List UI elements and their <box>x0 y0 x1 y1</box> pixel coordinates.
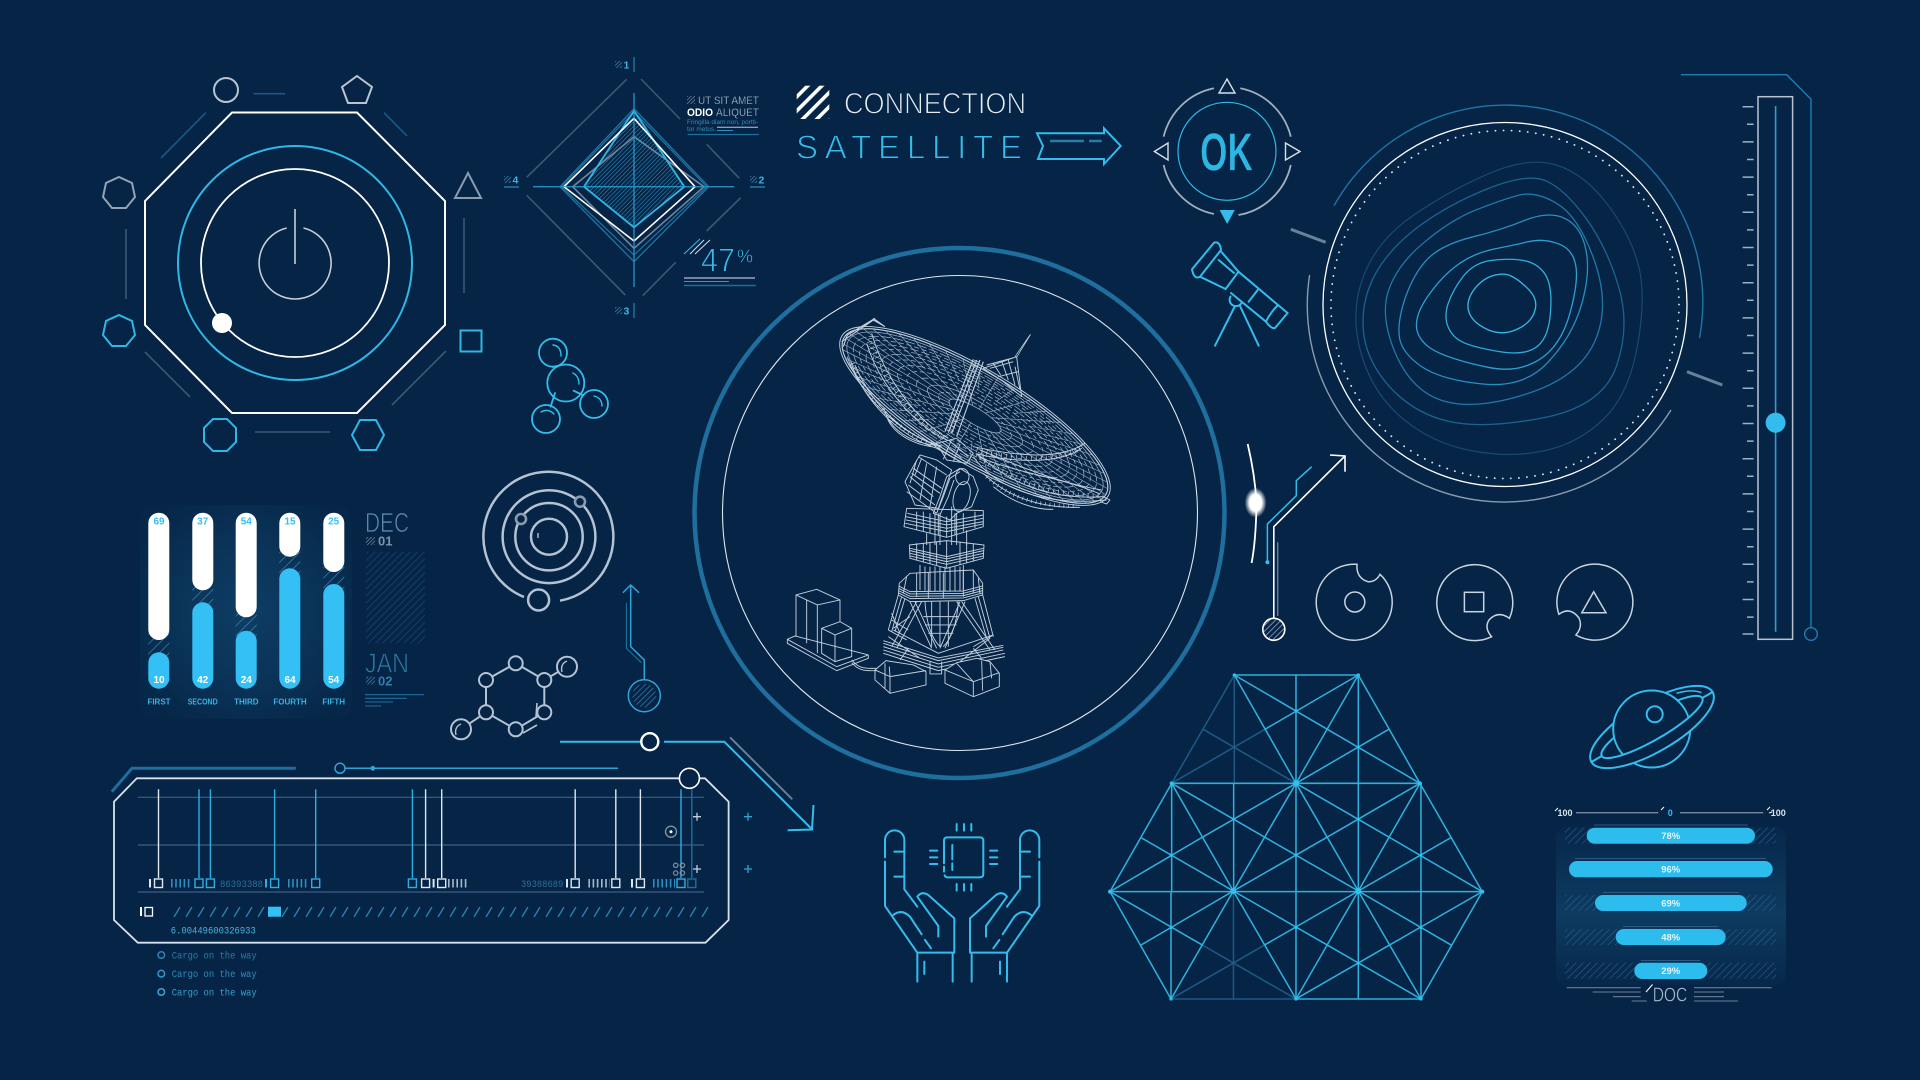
tower base and feet <box>875 630 1005 697</box>
radar legend text: UT SIT AMET <box>698 95 759 107</box>
frame <box>114 778 729 943</box>
radar axis labels: 1 <box>624 60 630 72</box>
slider frame <box>1758 97 1793 639</box>
tower platforms <box>898 507 984 602</box>
percentage values <box>1661 831 1681 977</box>
bar top values: 69 <box>153 516 165 528</box>
central dish rings <box>694 248 1224 778</box>
slider handle <box>1766 413 1786 433</box>
planet body <box>1613 690 1690 768</box>
bar labels: FIFTH <box>322 698 345 706</box>
cyan markers <box>195 789 685 888</box>
frame handle <box>679 768 699 788</box>
date 01: 01 <box>378 534 392 548</box>
bar bottom values <box>153 675 340 686</box>
radar data diamonds <box>533 93 734 287</box>
scale header: 100 <box>1557 808 1573 818</box>
plus signs and small icons <box>666 813 752 875</box>
scale header <box>1555 807 1786 818</box>
icon: hexagon molecule <box>451 656 577 739</box>
dial: triangle knob <box>1557 564 1633 640</box>
dish cross arm <box>945 359 983 437</box>
light streak <box>1245 444 1267 563</box>
scale header: 0 <box>1668 808 1673 818</box>
radar legend text: tor metus. <box>687 126 716 133</box>
OK compass button <box>1154 79 1300 224</box>
radar chart <box>504 57 765 318</box>
surrounding shapes <box>103 76 482 451</box>
outer grey arcs <box>1164 88 1291 215</box>
radar legend text <box>687 95 759 134</box>
47 percent readout: 47 <box>701 242 735 279</box>
feed truss and antenna <box>983 334 1031 397</box>
blue ring <box>178 146 412 380</box>
bracket line <box>1681 75 1817 640</box>
radar axis labels: 3 <box>624 306 630 318</box>
OK label: OK <box>1200 123 1253 183</box>
text lines <box>365 695 424 706</box>
percentage values: 96% <box>1661 864 1681 876</box>
percentage values: 48% <box>1661 932 1681 943</box>
date 02 <box>366 674 392 688</box>
dial: square knob <box>1437 565 1513 641</box>
dish right back lobe <box>973 443 1110 509</box>
contour lines <box>1356 162 1642 454</box>
panel: timeline <box>112 733 814 1000</box>
radar legend text: ODIO <box>687 107 713 119</box>
arrow: up connector <box>623 585 660 712</box>
geodesic hexagon <box>1108 673 1484 1001</box>
panel: bar chart <box>140 505 352 719</box>
white bars <box>148 513 344 640</box>
dial: circle knob <box>1316 564 1392 640</box>
bar labels: THIRD <box>234 698 259 706</box>
progress slash row <box>141 907 709 917</box>
slider track <box>1775 106 1777 632</box>
decorative top lines <box>112 763 618 792</box>
panel: power dial <box>103 76 482 451</box>
icon: molecule cluster <box>532 339 608 433</box>
47 percent readout: % <box>737 246 753 266</box>
main struts <box>1110 675 1482 999</box>
bar top values <box>153 516 340 528</box>
inner ring <box>1178 102 1276 200</box>
vertical slider <box>1681 75 1817 640</box>
ring handle <box>212 313 232 333</box>
icon: telescope <box>1192 242 1288 346</box>
tower legs <box>888 595 995 650</box>
icon: outlined arrow <box>1037 128 1121 164</box>
scale header: 100 <box>1771 808 1786 818</box>
date block <box>365 507 425 706</box>
percentage values: 69% <box>1661 898 1681 909</box>
outer rings <box>1291 105 1722 502</box>
timeline numbers: 86393388 <box>220 879 263 891</box>
radar axis labels: 4 <box>512 175 518 187</box>
hatched tracks <box>1565 828 1776 979</box>
radar axes and frame <box>504 57 765 318</box>
dim marker <box>688 789 696 888</box>
cargo status list <box>158 950 257 1000</box>
hub and yoke <box>905 438 978 520</box>
radar legend text: Fringilla diam non, portti- <box>687 119 758 126</box>
radar axis labels <box>504 60 764 318</box>
bar bottom values: 42 <box>197 675 209 686</box>
timeline numbers: 39388689 <box>521 879 563 891</box>
bar labels <box>147 698 345 706</box>
white markers <box>150 789 644 888</box>
planet spot <box>1647 706 1663 722</box>
icon: power symbol <box>259 209 331 299</box>
DOC caption: DOC <box>1653 985 1687 1007</box>
left hand <box>885 830 954 982</box>
panel: doc percentage bars <box>1555 807 1786 1007</box>
percentage bars <box>1569 828 1773 979</box>
dish bowl <box>818 296 1132 536</box>
bar labels: FOURTH <box>273 698 307 706</box>
ring back <box>1579 670 1713 762</box>
cargo status list: Cargo on the way <box>172 988 257 1000</box>
octagon frame <box>145 112 445 413</box>
white arrow <box>1263 455 1345 640</box>
thin rules above bars <box>1575 825 1766 960</box>
cargo status list: Cargo on the way <box>172 950 257 962</box>
blue bars <box>148 568 344 689</box>
bar labels: SECOND <box>188 698 218 706</box>
radar legend text: ALIQUET <box>716 107 759 119</box>
DEC label: DEC <box>365 507 409 538</box>
panel glow <box>1556 826 1786 986</box>
bar top values: 37 <box>197 516 209 528</box>
icon: ringed planet <box>1579 670 1725 784</box>
percentage values: 29% <box>1661 966 1681 977</box>
bar top values: 25 <box>328 516 340 528</box>
hatched block <box>366 552 425 643</box>
icon: orbit system <box>483 472 613 610</box>
bar bottom values: 24 <box>241 675 252 686</box>
chip <box>930 824 997 891</box>
bar bottom values: 54 <box>328 675 340 686</box>
bar labels: FIRST <box>147 698 171 706</box>
cyan trace <box>1265 467 1312 564</box>
dish left back lobe <box>842 318 948 449</box>
title satellite: SATELLITE <box>796 128 1022 166</box>
decorative dashes <box>126 94 464 432</box>
icon: striped square <box>797 86 829 119</box>
nodes <box>1108 673 1484 1001</box>
dim struts <box>1171 675 1296 999</box>
ring front <box>1583 677 1725 784</box>
signal spark and arrow <box>1245 444 1345 640</box>
barcode ticks <box>171 879 675 888</box>
equipment boxes <box>787 589 877 671</box>
date 01 <box>366 534 392 548</box>
bar top values: 15 <box>284 516 296 528</box>
arrow: long connector <box>560 733 814 830</box>
direction arrows <box>1154 79 1300 224</box>
scale ticks <box>1743 107 1754 634</box>
bar bottom values: 64 <box>284 675 296 686</box>
radar axis labels: 2 <box>758 175 764 187</box>
heading: connection satellite <box>796 86 1121 166</box>
title connection: CONNECTION <box>844 87 1026 120</box>
47 percent readout <box>684 239 756 286</box>
percentage values: 78% <box>1661 831 1681 842</box>
panel glow <box>140 505 352 719</box>
satellite dish wireframe <box>787 296 1132 697</box>
white ring <box>201 169 389 357</box>
bar top values: 54 <box>241 516 252 528</box>
DOC caption <box>1567 984 1772 1007</box>
cargo status list: Cargo on the way <box>172 969 257 981</box>
bar bottom values: 10 <box>153 675 165 686</box>
date 02: 02 <box>378 674 392 688</box>
timeline value: 6.00449600326933 <box>171 926 256 938</box>
bar hatching <box>148 548 344 660</box>
topographic contour globe <box>1291 105 1722 502</box>
timeline numbers <box>220 879 563 891</box>
horizontal rules <box>138 797 704 892</box>
right hand <box>970 830 1039 982</box>
icon: hands holding chip <box>885 824 1039 982</box>
JAN label: JAN <box>365 648 409 679</box>
